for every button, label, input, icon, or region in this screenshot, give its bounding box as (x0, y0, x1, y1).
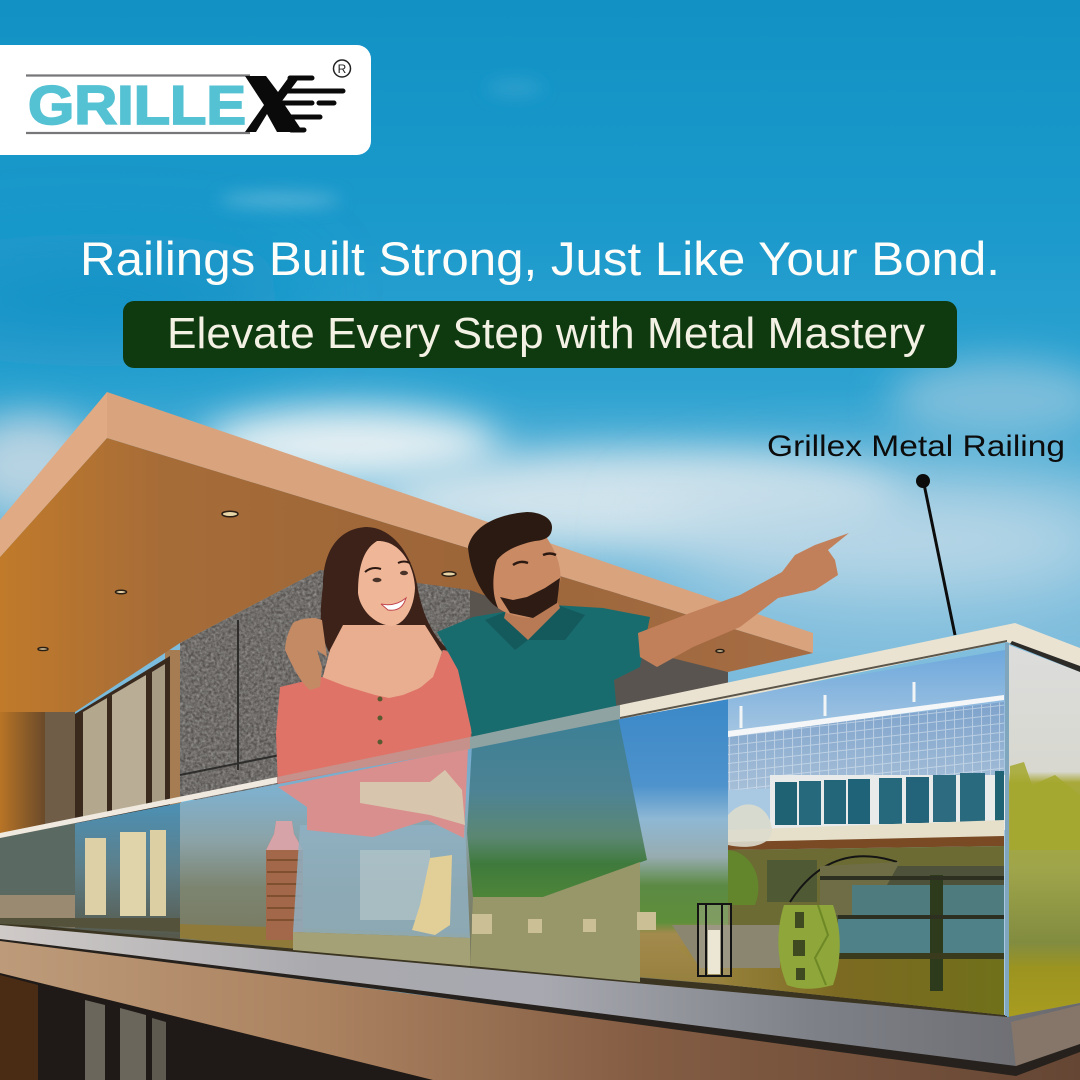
reflection below the slab (0, 970, 440, 1080)
roof fascia front (107, 392, 813, 653)
balcony floor slab (0, 925, 1080, 1080)
polo shirt (437, 605, 650, 760)
ceiling lights (38, 511, 724, 652)
building ledge (728, 820, 1004, 842)
neck (504, 595, 560, 640)
building windows (770, 771, 1005, 830)
man seen through glass (467, 716, 647, 982)
woman upper body (276, 527, 472, 790)
registered trademark mark: R (338, 62, 347, 76)
subheading banner: Elevate Every Step with Metal Mastery (167, 309, 925, 358)
eyes (513, 554, 556, 565)
polo collar (485, 606, 585, 650)
foliage on side glass (1010, 762, 1080, 850)
blouse through glass (278, 748, 468, 838)
face (358, 541, 415, 626)
hanging hand (412, 855, 452, 935)
green ceramic stool (778, 905, 840, 989)
building reflection panel (672, 650, 1005, 1015)
blouse (276, 650, 472, 790)
slab underside fascia (0, 940, 1080, 1080)
roof fascia side (0, 392, 107, 557)
eyes, brows and smile (365, 562, 410, 610)
jeans lower legs over deck (293, 932, 470, 966)
deck (672, 945, 1004, 1015)
slab dark groove (0, 939, 1080, 1076)
house windows (75, 656, 170, 830)
reflected cube planters (472, 912, 656, 934)
chest (322, 625, 442, 698)
glass railing (0, 623, 1080, 1018)
metal handrail (0, 623, 1080, 838)
trees on building reflection (728, 804, 772, 847)
face (477, 537, 560, 618)
logo wordmark: GRILLE (28, 74, 246, 136)
slab grey edge (0, 925, 1080, 1068)
callout: Grillex Metal Railing: Grillex Metal Railing (767, 430, 1065, 463)
terracotta vase reflection (266, 821, 303, 940)
roof underside (0, 438, 813, 712)
glass corner edge (1005, 643, 1009, 1016)
hair (468, 512, 552, 608)
logo X mark with speed lines (245, 76, 343, 132)
beard (500, 578, 560, 618)
left glass with window reflection (0, 803, 180, 939)
hand on shoulder (285, 618, 327, 690)
headline: Railings Built Strong, Just Like Your Bond. (80, 232, 1000, 285)
hair (321, 527, 449, 654)
house with overhanging roof (0, 392, 813, 840)
middle glass reflection (180, 697, 728, 985)
couple above railing (276, 512, 849, 790)
planter bowl (672, 925, 780, 968)
pointing arm and hand (638, 533, 849, 667)
jeans (293, 825, 470, 938)
lounge sofa (790, 856, 1004, 991)
house walls (0, 570, 728, 840)
trousers (470, 862, 640, 982)
right section of glass (618, 697, 728, 985)
folded arm (360, 770, 465, 825)
reflected deck strip (180, 924, 470, 965)
logo panel (0, 45, 371, 155)
woman seen through glass (278, 748, 470, 966)
subheading banner (123, 301, 957, 368)
slab side return (1011, 1005, 1080, 1068)
dark seal along glass base (0, 915, 1007, 1018)
side glass panel (1009, 645, 1080, 1017)
registered trademark mark (334, 60, 350, 77)
man upper body (285, 512, 849, 760)
callout: Grillex Metal Railing (767, 430, 1065, 635)
lantern (698, 904, 731, 976)
blouse buttons (378, 696, 382, 744)
